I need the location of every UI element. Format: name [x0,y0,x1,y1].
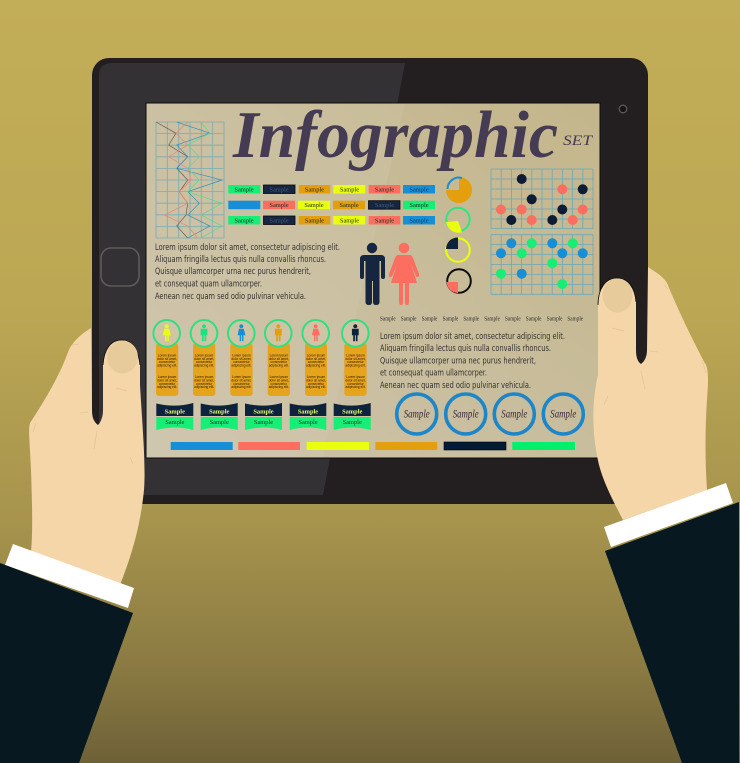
card 2: dolor sit amet, [194,378,214,382]
screen sheen [147,104,405,457]
sample label row [380,316,583,322]
ribbon 5 [334,403,371,430]
ribbon 5: Sample [342,408,362,416]
card 2 [191,320,217,396]
dot grid bottom [491,235,593,294]
sample label row: Sample [401,316,417,322]
subtitle: SET [563,133,594,149]
home button [101,248,139,286]
ribbon 1 [156,403,193,430]
card 6: consectetur [347,382,365,386]
ribbon 1: Sample [165,419,185,426]
card 5: dolor sit amet, [306,378,326,382]
card 5 [302,320,329,396]
card 1: adipiscing elit. [157,363,177,367]
left hand shape [29,328,145,590]
card 6: dolor sit amet, [345,357,366,361]
circle 2: Sample [453,408,479,420]
bezel sheen [99,63,405,495]
card 4: dolor sit amet, [269,357,289,361]
sample buttons: Sample [409,186,429,194]
screen [146,98,600,458]
sample label row: Sample [547,316,563,322]
ribbon 4: Sample [298,408,318,416]
card 2: adipiscing elit. [194,363,214,367]
camera [619,105,627,113]
female figure [389,243,419,305]
circle 4 [543,394,583,434]
left thumb outline [103,340,140,365]
sample buttons: Sample [304,202,324,209]
color bars [171,442,575,450]
sample label row: Sample [526,316,542,322]
sample label row: Sample [484,316,500,322]
sample label row: Sample [422,316,437,322]
card 5: dolor sit amet, [306,357,326,361]
card 5: adipiscing elit. [306,363,326,367]
ribbon 2: Sample [209,408,229,416]
card 6: adipiscing elit. [345,385,366,389]
sample buttons: Sample [340,218,359,224]
sample buttons: Sample [305,186,324,194]
card 3: Lorem ipsum [232,375,251,379]
sample buttons: Sample [234,218,254,224]
card 2: Lorem ipsum [195,375,214,379]
right cuff [604,483,733,547]
card 4 [265,320,292,396]
sample buttons: Sample [339,202,359,209]
left hand creases [33,344,133,464]
card 3: Lorem ipsum [232,354,251,358]
sample buttons: Sample [269,186,289,194]
pie icon 2 [446,208,470,233]
card 6: consectetur [347,360,365,364]
text block right: et consequat quam ullamcorper. [380,369,487,379]
circle 1 [397,394,437,434]
left cuff [5,544,134,608]
card 6: adipiscing elit. [345,363,366,367]
card 1: dolor sit amet, [157,378,177,382]
card 6: dolor sit amet, [345,378,366,382]
sample buttons: Sample [305,218,324,224]
card 1: dolor sit amet, [157,357,177,361]
sample label row: Sample [443,316,458,322]
card 3: dolor sit amet, [231,378,252,382]
card 5: consectetur [308,382,325,386]
right sleeve [605,502,739,763]
card 3: dolor sit amet, [231,357,252,361]
left hand [0,328,145,763]
ribbon 1: Sample [165,408,185,416]
card 1: consectetur [159,382,176,386]
text block right: Aenean nec quam sed odio pulvinar vehicula. [380,381,531,391]
sample buttons: Sample [375,186,394,194]
sample buttons: Sample [269,202,289,209]
sample label row: Sample [567,316,583,322]
card 6 [342,320,369,396]
ribbon 3: Sample [253,408,274,416]
text block left [155,243,340,302]
card 4: Lorem ipsum [270,375,288,379]
card 3 [228,320,255,396]
card 6: Lorem ipsum [346,354,365,358]
tablet [92,58,648,504]
left thumbnail [107,340,138,374]
card 1 [153,320,180,396]
pie icon 4 [446,269,471,293]
ribbon 3: Sample [254,419,273,426]
text block left: Lorem ipsum dolor sit amet, consectetur adipiscing elit. [155,243,340,253]
tablet body [92,58,648,504]
ribbon 2: Sample [210,419,229,426]
text block left: Aliquam fringilla lectus quis nulla convallis rhoncus. [155,255,326,265]
card 2: consectetur [196,360,213,364]
pie icons [446,177,472,293]
right thumb outline [598,278,636,305]
card 3: adipiscing elit. [231,363,252,367]
left sleeve [0,563,133,763]
card 2: adipiscing elit. [194,385,214,389]
right hand [593,267,739,763]
sample buttons: Sample [409,218,429,224]
text block right: Quisque ullamcorper urna nec purus hendrerit, [380,356,536,366]
sample buttons: Sample [340,186,359,194]
card 5: consectetur [308,360,325,364]
sample buttons: Sample [269,218,289,224]
card 4: adipiscing elit. [269,363,289,367]
card 3: adipiscing elit. [231,385,252,389]
ribbon 2 [201,403,238,430]
sample buttons [228,185,435,224]
screen background [146,103,600,458]
sample label row: Sample [463,316,479,322]
card 2: consectetur [196,382,213,386]
ribbon 4: Sample [298,419,318,426]
circle 3: Sample [501,408,527,420]
line chart [156,122,224,238]
card 4: adipiscing elit. [269,385,289,389]
ribbon 3 [245,403,282,430]
card 5: adipiscing elit. [306,385,326,389]
sample buttons: Sample [375,202,394,209]
card 4: Lorem ipsum [270,354,288,358]
sample circles [397,394,583,434]
sample label row: Sample [505,316,521,322]
card 1: adipiscing elit. [157,385,177,389]
card 4: consectetur [271,382,288,386]
person cards [153,320,369,396]
pie icon 1 [446,177,472,203]
card 2: Lorem ipsum [195,354,214,358]
card 5: Lorem ipsum [307,354,326,358]
text block right [380,332,565,391]
card 6: Lorem ipsum [346,375,365,379]
card 4: dolor sit amet, [269,378,289,382]
right hand shape [593,267,708,520]
right hand creases [604,285,706,405]
circle 2 [446,394,486,434]
right thumbnail [602,278,632,312]
card 1: Lorem ipsum [158,354,177,358]
text block left: Quisque ullamcorper urna nec purus hendrerit, [155,267,311,277]
text block left: et consequat quam ullamcorper. [155,280,262,290]
card 2: dolor sit amet, [194,357,214,361]
sample buttons: Sample [234,186,254,194]
card 1: consectetur [159,360,176,364]
text block right: Aliquam fringilla lectus quis nulla convallis rhoncus. [380,344,551,354]
card 4: consectetur [271,360,288,364]
circle 3 [494,394,534,434]
sample label row: Sample [380,316,396,322]
ribbon 5: Sample [343,419,362,426]
text block right: Lorem ipsum dolor sit amet, consectetur adipiscing elit. [380,332,565,342]
card 1: Lorem ipsum [158,375,177,379]
ribbons [156,403,371,430]
text block left: Aenean nec quam sed odio pulvinar vehicula. [155,292,306,302]
card 3: consectetur [233,382,251,386]
title: Infographic [232,98,558,172]
card 5: Lorem ipsum [307,375,326,379]
circle 4: Sample [550,408,576,420]
sample buttons: Sample [375,218,394,224]
card 3: consectetur [233,360,251,364]
pie icon 3 [446,237,470,262]
ribbon 4 [290,403,326,430]
circle 1: Sample [404,408,430,420]
sample buttons: Sample [409,202,429,209]
male figure [360,243,385,305]
dot grid top [491,169,593,228]
